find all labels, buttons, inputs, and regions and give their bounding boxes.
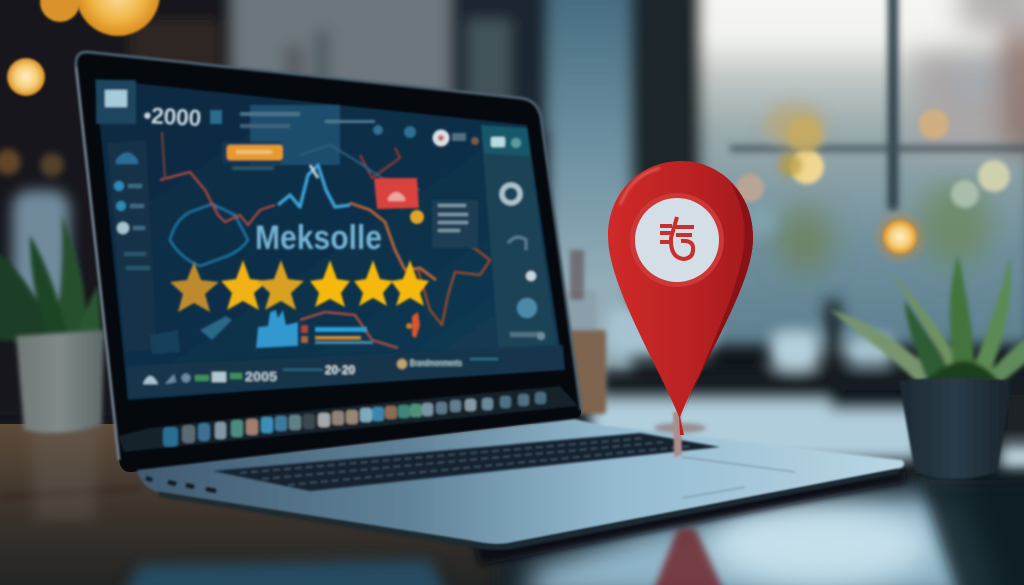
plant: left [0,215,104,433]
map pin [608,161,753,457]
right sidebar [481,125,558,368]
top status row [373,125,479,146]
orange label [222,142,283,170]
laptop base [137,419,904,545]
screen [95,79,565,400]
desk surface [0,424,1024,585]
date label two: 20·20 [325,363,355,377]
top counter: •2000 [143,102,202,131]
pin stem [673,412,682,457]
status caption: Brandmonments [410,358,462,368]
bokeh lights [0,0,1010,261]
laptop lid [76,52,581,472]
pin ring [630,193,724,287]
date label one: 2005 [245,369,277,384]
back table band [590,300,1024,469]
brand wordmark: Meksolle [255,219,382,257]
left pot [16,330,104,433]
red badge [374,178,478,248]
rupee style logo [660,217,694,259]
left menu [107,140,157,352]
left reflection of screen [120,560,450,585]
bottom status bar [127,345,565,398]
ports [146,478,216,491]
trackpad edge [682,457,795,498]
right pot [899,378,1012,479]
blurred person at far left [12,190,70,310]
coffee cup behind laptop [566,250,606,414]
laptop [76,52,904,550]
star rating [170,260,429,312]
pin body [608,161,753,435]
bar chart [150,310,420,354]
keyboard [213,433,720,491]
dock [118,386,578,452]
right table with reflections [500,480,1024,585]
plant: right [830,255,1024,479]
map and line chart [160,132,490,348]
pin shadow [654,423,706,433]
top left tile [96,80,375,165]
